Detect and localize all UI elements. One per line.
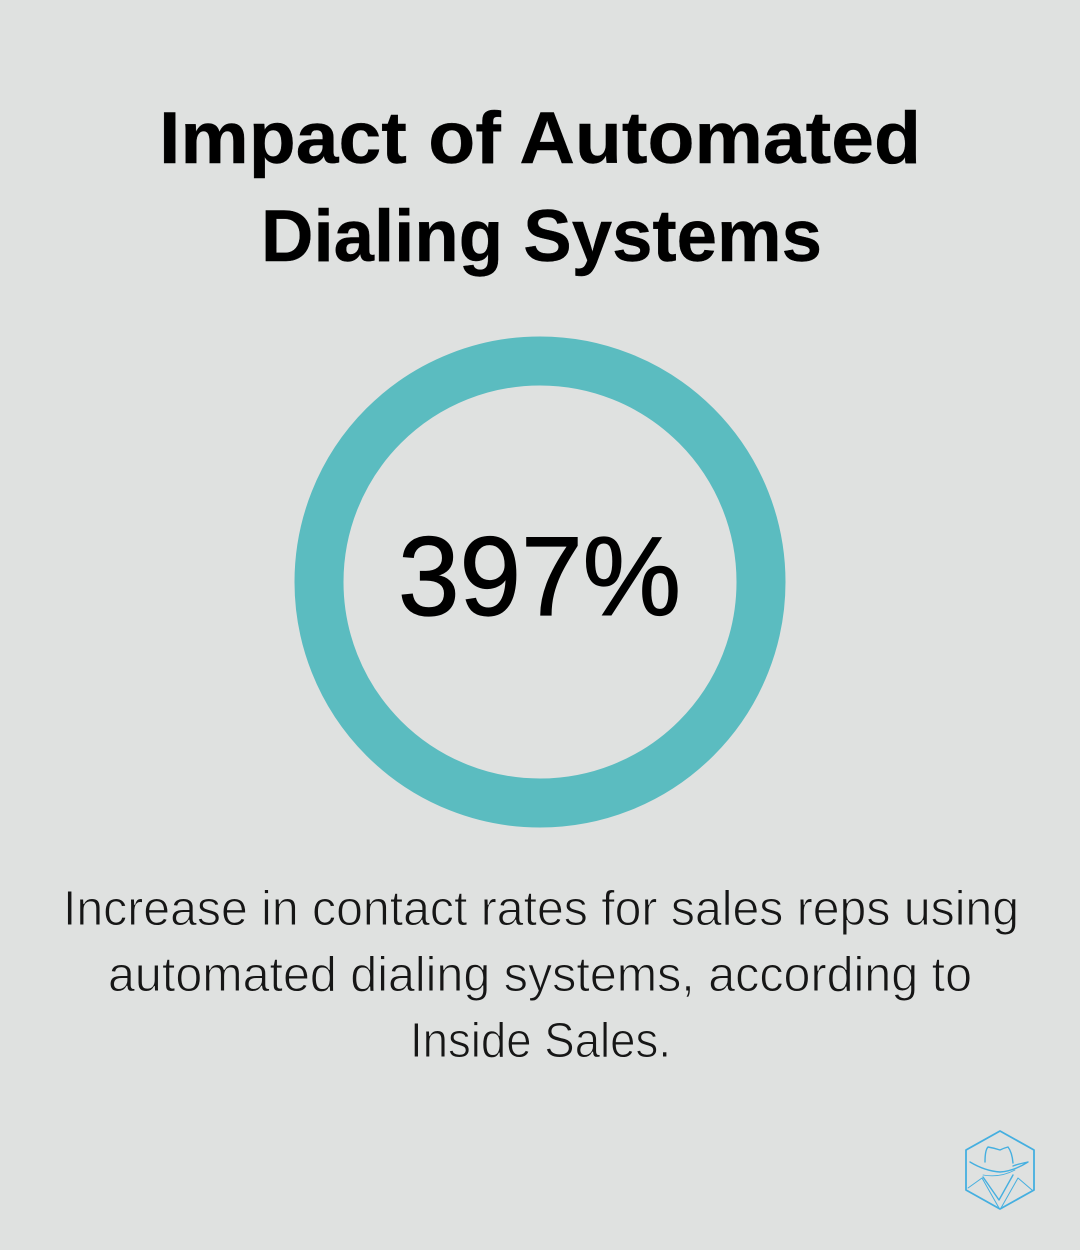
description text: automated dialing systems, according to — [108, 948, 972, 1002]
donut ring chart — [319, 361, 761, 803]
description text: Increase in contact rates for sales reps using — [63, 882, 1019, 936]
description text: Inside Sales. — [410, 1014, 671, 1068]
big number: 397% — [398, 514, 681, 639]
description text — [63, 882, 1019, 1068]
icon: hexagon logo with hat and suit — [966, 1131, 1034, 1209]
title: Impact of Automated — [159, 98, 921, 179]
title — [159, 98, 921, 277]
title: Dialing Systems — [261, 196, 822, 277]
